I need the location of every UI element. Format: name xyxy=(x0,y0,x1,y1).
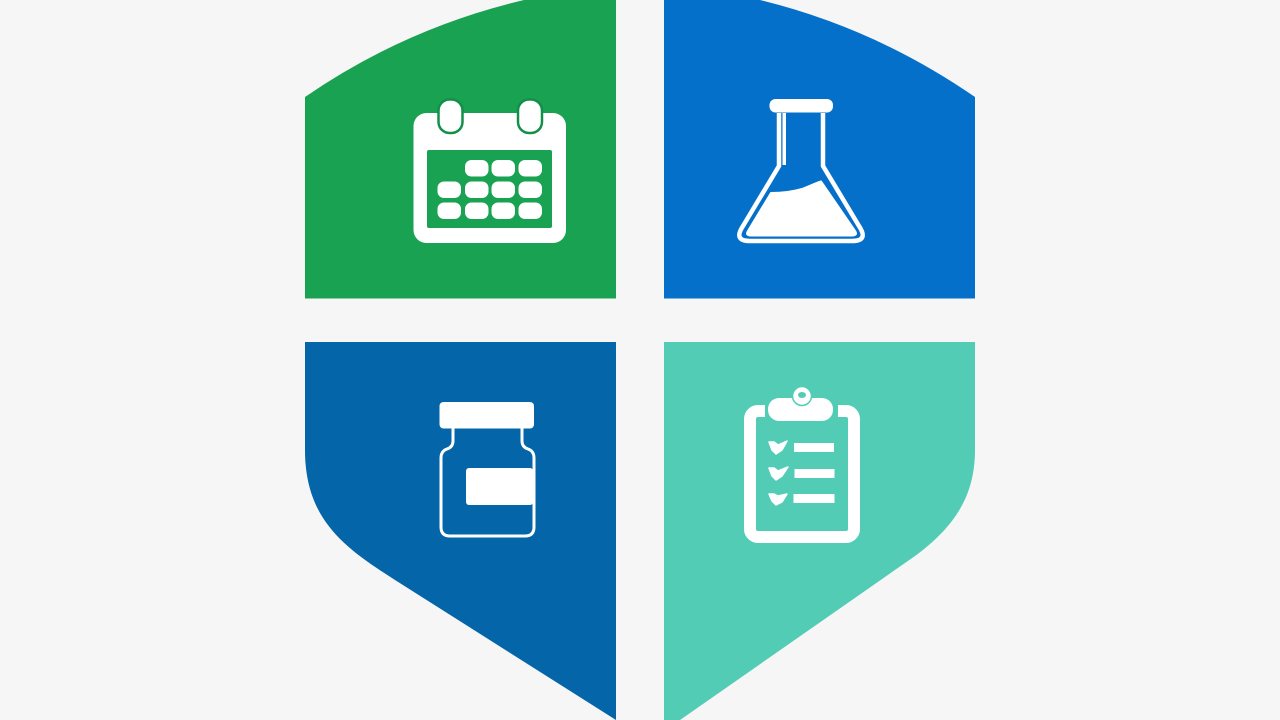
icon: flask xyxy=(739,99,863,241)
icon: calendar xyxy=(414,100,566,243)
green quadrant shape xyxy=(305,0,616,298)
panel: green top-left quadrant xyxy=(305,0,616,298)
icon: jar xyxy=(440,402,534,536)
blue quadrant shape xyxy=(664,0,975,298)
panel: teal bottom-right quadrant xyxy=(664,342,975,720)
teal quadrant shape xyxy=(664,342,975,720)
icon: clipboard xyxy=(750,386,854,537)
panel: blue top-right quadrant xyxy=(664,0,975,298)
dark blue quadrant shape xyxy=(305,342,616,720)
panel: dark blue bottom-left quadrant xyxy=(305,342,616,720)
